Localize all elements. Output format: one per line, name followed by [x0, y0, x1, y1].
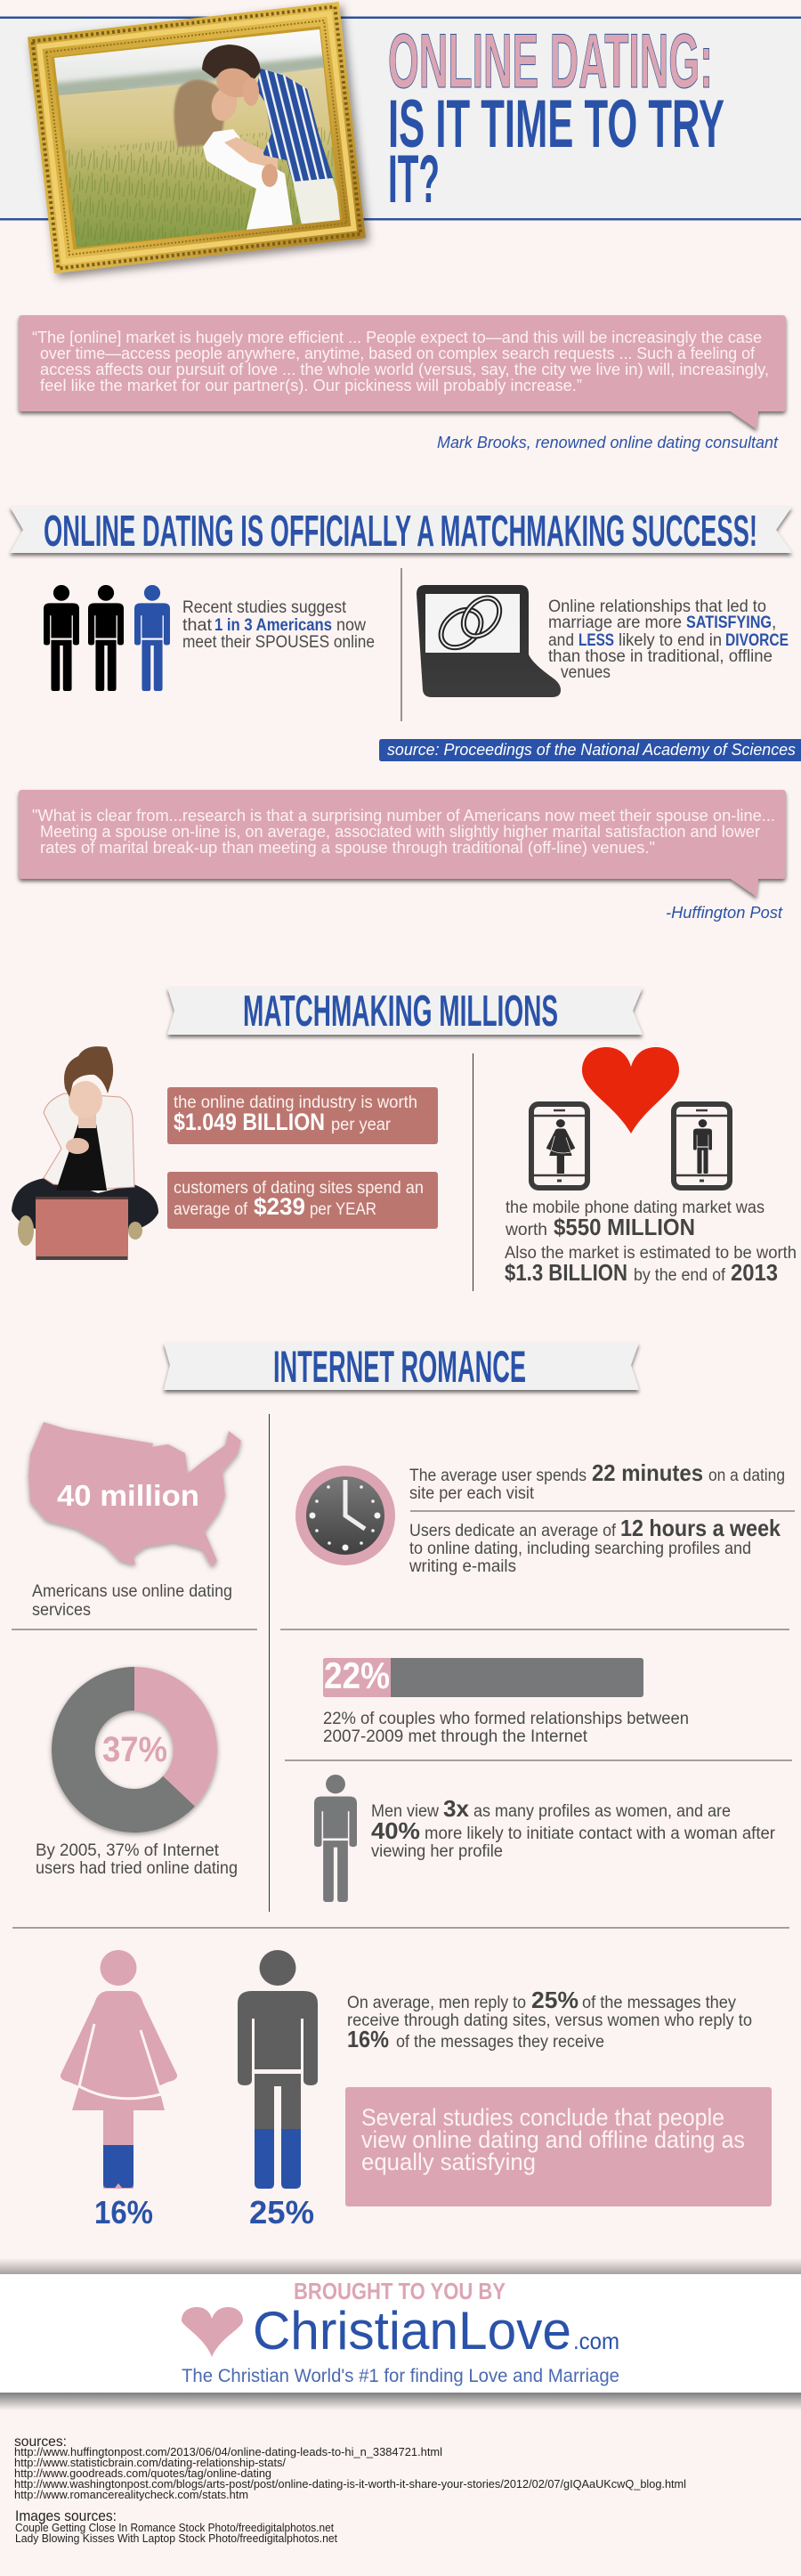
text: men view 3x: as many profiles as women, and are	[473, 1802, 731, 1821]
image sources list	[15, 2507, 337, 2545]
text: 12 hours a week: Users dedicate an average of	[409, 1522, 617, 1540]
sources list: sources:	[14, 2434, 67, 2450]
attribution: Huffington Post: -Huffington Post	[666, 904, 783, 922]
text: 12 hours a week: writing e-mails	[409, 1557, 516, 1576]
quote: Mark Brooks: “The [online] market is hugely more efficient ... People expect to—and this will be increasingly the case	[32, 329, 762, 346]
sources list: http://www.romancerealitycheck.com/stats.htm	[14, 2488, 248, 2501]
footer band: ChristianLove	[0, 2258, 801, 2410]
text: mobile market: $550 MILLION	[554, 1214, 695, 1240]
text: men view 3x: 40%	[371, 1817, 420, 1844]
sources list: http://www.huffingtonpost.com/2013/06/04/online-dating-leads-to-hi_n_3384721.html	[14, 2445, 442, 2458]
text: 22 minutes: 22 minutes	[592, 1459, 703, 1486]
ribbon heading: matchmaking millions: MATCHMAKING MILLIONS	[243, 987, 558, 1036]
text: 22 minutes: on a dating	[708, 1467, 785, 1485]
quote: Huffington Post	[19, 790, 786, 897]
quote: Huffington Post: rates of marital break-up than meeting a spouse through traditional (off-line) venues."	[40, 839, 655, 857]
text: Americans use online dating	[32, 1582, 232, 1620]
text: 12 hours a week: to online dating, including searching profiles and	[409, 1540, 751, 1558]
text: reply rates: of the messages they receive	[396, 2033, 604, 2052]
ribbon heading: internet romance: INTERNET ROMANCE	[273, 1342, 526, 1392]
text: 1 in 3 Americans: that	[182, 616, 213, 635]
map: United States, 40 million	[28, 1422, 241, 1567]
heart	[582, 1047, 679, 1134]
quote: Mark Brooks: access affects our pursuit of love ... the whole world (versus, say, the city we live in) will, increasingly,	[40, 361, 769, 378]
stat: customer spend: per YEAR	[310, 1200, 376, 1219]
ribbon heading: matchmaking millions	[167, 987, 643, 1036]
figure: woman 16%: 16%	[94, 2194, 153, 2231]
text: 1 in 3 Americans: 1 in 3 Americans	[214, 616, 332, 635]
stat: industry worth: $1.049 BILLION	[174, 1109, 325, 1135]
quote: Mark Brooks: feel like the market for our partner(s). Our pickiness will probably increase.”	[40, 377, 582, 394]
sources list: http://www.washingtonpost.com/blogs/arts-post/post/online-dating-is-it-worth-it-share-your-stories/2012/02/07/gIQAaUKcwQ_blog.html	[14, 2477, 686, 2491]
footer band: ChristianLove: ChristianLove	[253, 2301, 571, 2361]
callout: equally satisfying	[345, 2087, 772, 2206]
text: reply rates: receive through dating sites, versus women who reply to	[347, 2011, 752, 2030]
text: 1 in 3 Americans: Recent studies suggest	[182, 598, 347, 617]
text: 22 minutes	[409, 1459, 785, 1503]
quote: Mark Brooks: over time—access people anywhere, anytime, based on complex search requests ... Such a feeling of	[40, 345, 756, 362]
text: men view 3x: more likely to initiate contact with a woman after	[425, 1824, 776, 1843]
icon: pink heart	[182, 2307, 243, 2357]
text: online relationships: SATISFYING	[686, 614, 772, 632]
text: 1 in 3 Americans	[182, 598, 375, 652]
text: by 2005: By 2005, 37% of Internet	[36, 1841, 220, 1860]
text: mobile market: 2013	[731, 1259, 778, 1286]
text: reply rates: On average, men reply to	[347, 1994, 526, 2012]
text: online relationships	[548, 597, 789, 682]
footer band: ChristianLove: The Christian World's #1 for finding Love and Marriage	[182, 2366, 619, 2386]
text: Americans use online dating: services	[32, 1601, 91, 1620]
donut chart: 37%: 37%	[102, 1730, 167, 1769]
icon: three people, one highlighted	[44, 585, 170, 691]
callout: equally satisfying: Several studies conclude that people	[361, 2104, 724, 2131]
stat: customer spend: $239	[254, 1193, 305, 1220]
text: online relationships: DIVORCE	[725, 631, 789, 650]
quote: Huffington Post: Meeting a spouse on-line is, on average, associated with slightly higher marital satisfaction and lower	[40, 823, 760, 841]
text: by 2005: users had tried online dating	[36, 1859, 238, 1878]
text: 22% of couples: 22% of couples who formed relationships between	[323, 1710, 689, 1728]
text: online relationships: Online relationships that led to	[548, 597, 766, 616]
footer band: ChristianLove: BROUGHT TO YOU BY	[294, 2278, 506, 2304]
source tag: source: Proceedings of the National Academy of Sciences	[387, 741, 796, 759]
text: 22 minutes: site per each visit	[409, 1484, 535, 1503]
text: reply rates: of the messages they	[582, 1994, 736, 2012]
stat: customer spend	[167, 1172, 438, 1229]
text: men view 3x: viewing her profile	[371, 1842, 503, 1861]
framed photo of couple	[28, 2, 366, 273]
image sources list: Images sources:	[15, 2507, 117, 2524]
text: 22% of couples	[323, 1710, 689, 1746]
donut chart: 37%	[52, 1667, 217, 1832]
text: men view 3x	[371, 1795, 776, 1861]
text: online relationships: than those in traditional, offline	[548, 647, 773, 666]
attribution: Mark Brooks: Mark Brooks, renowned online dating consultant	[437, 434, 779, 451]
icon: tablet with wedding rings	[417, 585, 561, 697]
text: mobile market: $1.3 BILLION	[505, 1259, 627, 1286]
sources list: http://www.statisticbrain.com/dating-relationship-stats/	[14, 2456, 286, 2469]
text: mobile market: worth	[505, 1221, 547, 1239]
text: online relationships: and	[548, 631, 574, 650]
sources list: http://www.goodreads.com/quotes/tag/online-dating	[14, 2466, 271, 2480]
quote: Huffington Post: "What is clear from...research is that a surprising number of Americans now meet their spouse on-line...	[32, 807, 775, 825]
ribbon heading: internet romance	[164, 1342, 639, 1392]
figure: man 25%	[238, 1950, 318, 2231]
text: 1 in 3 Americans: now	[336, 616, 366, 635]
text: men view 3x: Men view	[371, 1802, 439, 1821]
text: reply rates: 25%	[531, 1987, 578, 2013]
text: mobile market: the mobile phone dating market was	[506, 1199, 765, 1217]
image: woman with laptop	[12, 1046, 158, 1260]
icon: clock	[295, 1466, 395, 1565]
stat: customer spend: customers of dating sites spend an	[174, 1179, 424, 1198]
stat: industry worth: the online dating industry is worth	[174, 1093, 417, 1112]
image sources list: Lady Blowing Kisses With Laptop Stock Photo/freedigitalphotos.net	[15, 2531, 337, 2545]
icon: two phones and heart	[531, 1047, 730, 1188]
figure: man 25%: 25%	[249, 2194, 314, 2231]
text: Americans use online dating: Americans use online dating	[32, 1582, 232, 1601]
title: IT?	[388, 142, 440, 217]
text: 1 in 3 Americans: meet their SPOUSES online	[182, 633, 375, 652]
text: online relationships: ,	[772, 614, 776, 632]
callout: equally satisfying: equally satisfying	[361, 2149, 536, 2175]
man in photo	[202, 45, 347, 230]
bar chart: 22%	[323, 1654, 643, 1697]
header band	[0, 16, 801, 221]
footer band: ChristianLove: .com	[573, 2328, 619, 2354]
text: online relationships: likely to end in	[619, 631, 722, 650]
stat: industry worth	[167, 1087, 438, 1144]
bar chart: 22%: 22%	[324, 1654, 390, 1696]
figure: woman 16%	[61, 1950, 177, 2231]
text: mobile market: by the end of	[634, 1266, 726, 1285]
text: 12 hours a week: 12 hours a week	[620, 1515, 781, 1541]
text: online relationships: LESS	[578, 631, 614, 650]
text: mobile market: Also the market is estimated to be worth	[505, 1244, 797, 1263]
icon: grey man	[314, 1775, 357, 1902]
text: 22 minutes: The average user spends	[409, 1467, 587, 1485]
woman in photo	[174, 79, 294, 233]
title	[388, 19, 724, 217]
stat: customer spend: average of	[174, 1200, 248, 1219]
sources list	[14, 2434, 686, 2501]
text: online relationships: venues	[561, 663, 611, 682]
text: 22% of couples: 2007-2009 met through the Internet	[323, 1727, 588, 1746]
text: reply rates	[347, 1987, 752, 2052]
image sources list: Couple Getting Close In Romance Stock Photo/freedigitalphotos.net	[15, 2521, 334, 2534]
quote: Mark Brooks	[19, 315, 786, 429]
map: United States, 40 million: 40 million	[57, 1479, 199, 1512]
text: online relationships: marriage are more	[548, 614, 682, 632]
stat: industry worth: per year	[331, 1116, 392, 1134]
text: men view 3x: 3x	[443, 1795, 470, 1822]
text: by 2005	[36, 1841, 238, 1878]
text: 12 hours a week	[409, 1515, 781, 1576]
text: reply rates: 16%	[347, 2026, 389, 2052]
callout: equally satisfying: view online dating and offline dating as	[361, 2126, 745, 2153]
text: mobile market	[505, 1199, 797, 1286]
